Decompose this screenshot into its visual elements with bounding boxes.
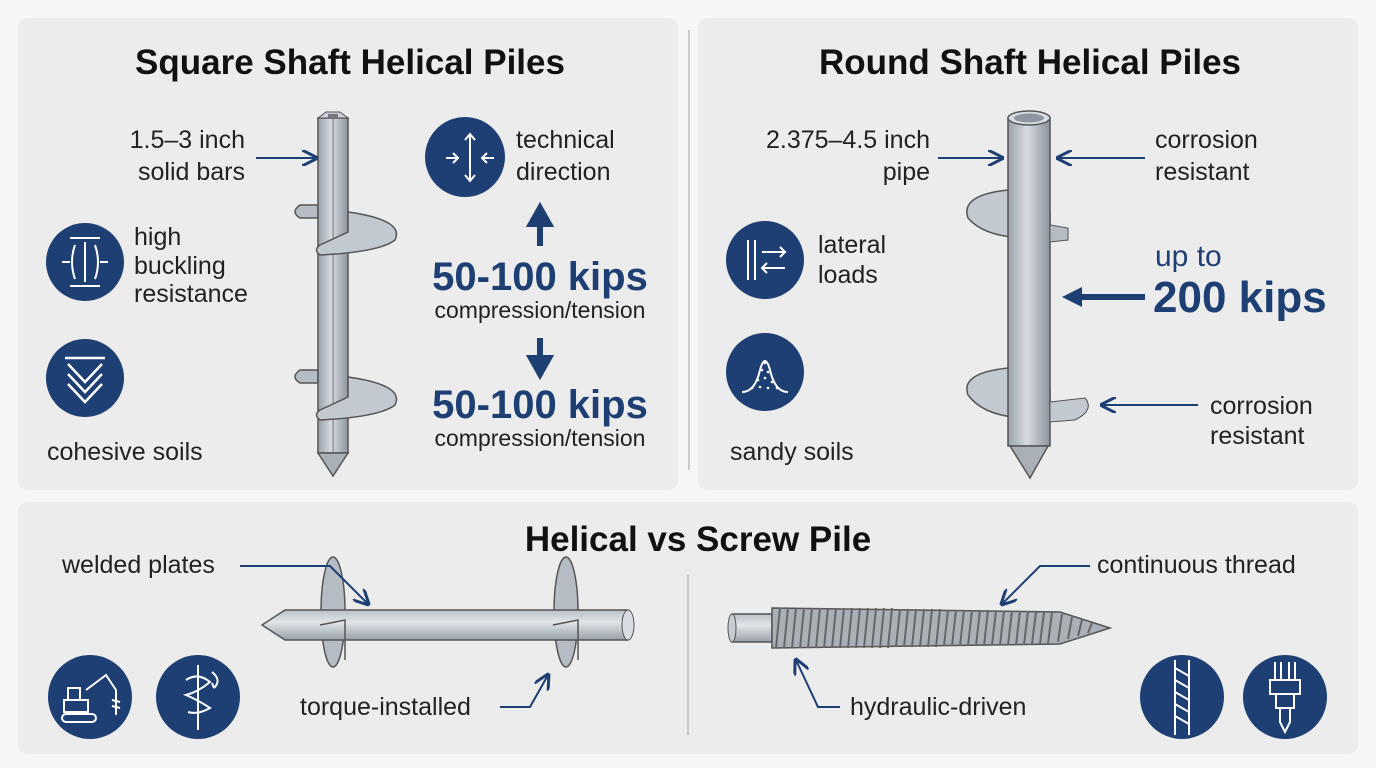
icon: sandy soils [726, 333, 804, 411]
label: solid bars [130, 126, 316, 186]
stat: up to 200 kips: 200 kips [1153, 273, 1327, 322]
title: helical vs screw: Helical vs Screw Pile [525, 520, 871, 559]
text: cohesive soils: cohesive soils [47, 438, 203, 466]
title: round shaft: Round Shaft Helical Piles [819, 43, 1241, 82]
text: lateral loads: loads [818, 261, 878, 289]
label: hydraulic-driven: hydraulic-driven [850, 693, 1026, 721]
pile: round shaft [967, 111, 1088, 478]
label: solid bars: solid bars [138, 158, 245, 186]
stat: 50-100 kips 1: 50-100 kips [432, 255, 648, 299]
label: corrosion resistant bottom: resistant [1210, 422, 1305, 450]
icon: auger rotation [156, 655, 240, 739]
label: welded plates: welded plates [61, 551, 215, 579]
arrow: up [531, 208, 549, 246]
pile: helical horizontal [262, 557, 634, 667]
label: corrosion resistant top: corrosion [1155, 126, 1258, 154]
pile: screw [728, 608, 1110, 648]
title: square shaft: Square Shaft Helical Piles [135, 43, 565, 82]
panel: square shaft [18, 18, 678, 490]
label: torque-installed [300, 675, 548, 721]
stat: 50-100 kips 1: compression/tension [435, 297, 645, 323]
label: corrosion resistant top [1058, 126, 1258, 186]
stat: up to 200 kips [1062, 240, 1327, 322]
label: torque-installed: torque-installed [300, 693, 471, 721]
label: corrosion resistant bottom [1102, 392, 1313, 450]
label: welded plates [61, 551, 368, 604]
label: continuous thread [1002, 551, 1296, 604]
stat: up to 200 kips: up to [1155, 240, 1222, 273]
label: corrosion resistant bottom: corrosion [1210, 392, 1313, 420]
text: technical direction [516, 126, 615, 186]
label: solid bars: 1.5–3 inch [130, 126, 245, 154]
icon: cohesive soils [46, 339, 124, 417]
text: lateral loads [818, 231, 886, 289]
label: pipe: 2.375–4.5 inch [766, 126, 930, 154]
icon: excavator [48, 655, 132, 739]
panel: round shaft [698, 18, 1358, 490]
arrow: down [531, 338, 549, 374]
text: high buckling resistance [134, 223, 248, 308]
text: technical direction: direction [516, 158, 610, 186]
text: sandy soils: sandy soils [730, 438, 854, 466]
text: high buckling resistance: resistance [134, 280, 248, 308]
icon: lateral loads [726, 221, 804, 299]
text: high buckling resistance: buckling [134, 252, 226, 280]
icon: thread [1140, 655, 1224, 739]
icon: hydraulic driver [1243, 655, 1327, 739]
label: corrosion resistant top: resistant [1155, 158, 1250, 186]
panel: helical vs screw [18, 502, 1358, 754]
label: continuous thread: continuous thread [1097, 551, 1296, 579]
stat: 50-100 kips 2: 50-100 kips [432, 383, 648, 427]
icon: technical direction [425, 117, 505, 197]
stat: 50-100 kips 1 [432, 255, 648, 323]
text: technical direction: technical [516, 126, 615, 154]
pile: square shaft [295, 112, 396, 476]
text: lateral loads: lateral [818, 231, 886, 259]
text: high buckling resistance: high [134, 223, 181, 251]
label: pipe: pipe [883, 158, 930, 186]
stat: 50-100 kips 2: compression/tension [435, 425, 645, 451]
icon: buckling [46, 223, 124, 301]
label: hydraulic-driven [796, 660, 1026, 721]
stat: 50-100 kips 2 [432, 383, 648, 451]
label: pipe [766, 126, 1002, 186]
